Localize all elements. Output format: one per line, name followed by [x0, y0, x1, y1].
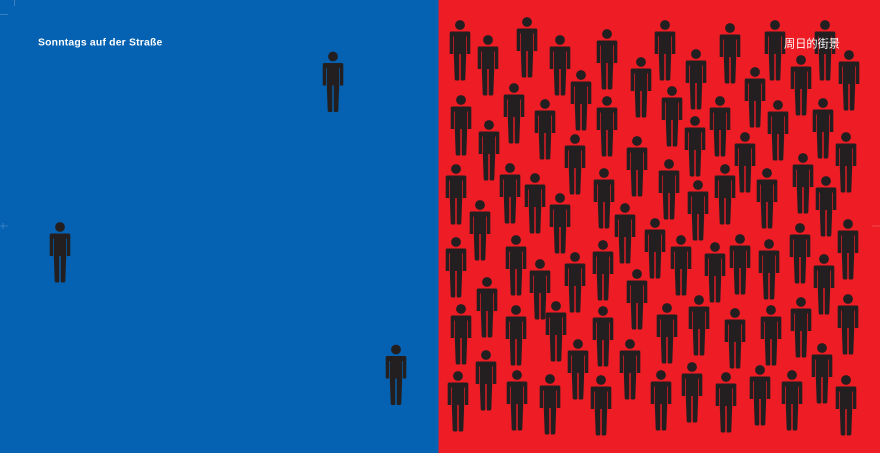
- heading: Chinese title: 周日的街景: [784, 36, 840, 50]
- figure: lone person bottom: [386, 345, 406, 405]
- panel: blue left side: [0, 0, 438, 453]
- heading: Sonntags auf der Straße: Sonntags auf der Straße: [38, 38, 162, 48]
- figure: lone person left: [50, 222, 70, 282]
- figure: lone person top: [323, 52, 343, 112]
- panel: red right side: [438, 0, 880, 453]
- crowd of people: [446, 17, 859, 435]
